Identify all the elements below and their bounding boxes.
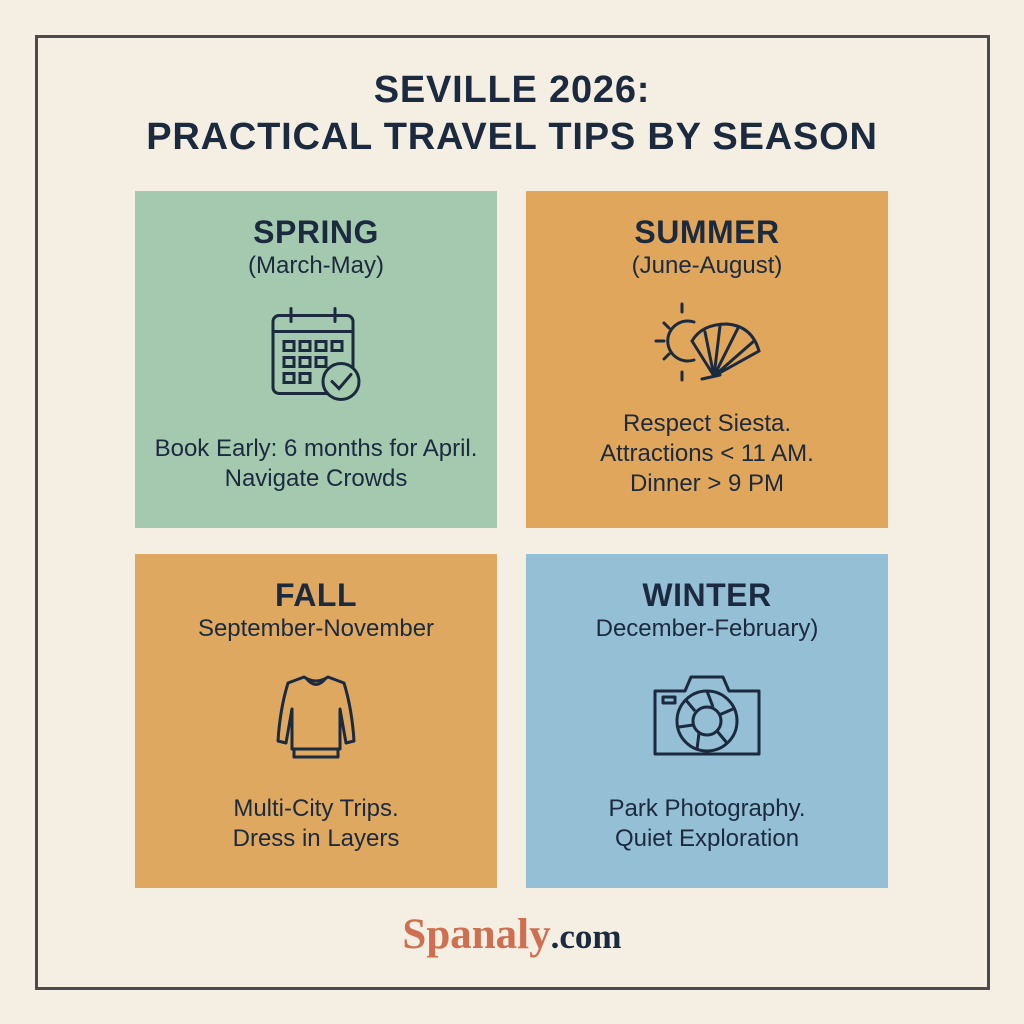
text: spring tips: Book Early: 6 months for April. [155, 435, 477, 462]
subheading: winter dates: December-February) [596, 615, 818, 642]
text: spring tips: Navigate Crowds [225, 465, 407, 492]
text: fall tips: Dress in Layers [233, 825, 399, 852]
text: fall tips [233, 795, 399, 852]
logo: Spanaly.com: Spanaly.com [402, 911, 622, 958]
panel: spring [135, 191, 497, 528]
panel: fall [135, 554, 497, 888]
heading: winter: WINTER [642, 577, 772, 613]
heading: fall: FALL [275, 577, 357, 613]
icon: sun and fan [654, 302, 761, 382]
text: winter tips: Park Photography. [608, 795, 806, 822]
title [146, 69, 878, 158]
text: summer tips: Dinner > 9 PM [630, 470, 784, 497]
icon: calendar [272, 307, 360, 401]
panel: winter [526, 554, 888, 888]
text: spring tips [155, 435, 477, 492]
text: summer tips: Attractions < 11 AM. [600, 440, 814, 467]
text: summer tips: Respect Siesta. [623, 410, 791, 437]
text: winter tips [608, 795, 806, 852]
text: summer tips [600, 410, 814, 497]
title: PRACTICAL TRAVEL TIPS BY SEASON [146, 116, 878, 158]
subheading: fall dates: September-November [198, 615, 434, 642]
icon: camera [654, 676, 760, 756]
panel: summer [526, 191, 888, 528]
heading: spring: SPRING [253, 214, 379, 250]
text: fall tips: Multi-City Trips. [233, 795, 399, 822]
subheading: summer dates: (June-August) [632, 252, 782, 279]
heading: summer: SUMMER [634, 214, 780, 250]
title: SEVILLE 2026: [374, 69, 650, 111]
subheading: spring dates: (March-May) [248, 252, 384, 279]
text: winter tips: Quiet Exploration [615, 825, 799, 852]
icon: sweater [276, 676, 356, 758]
